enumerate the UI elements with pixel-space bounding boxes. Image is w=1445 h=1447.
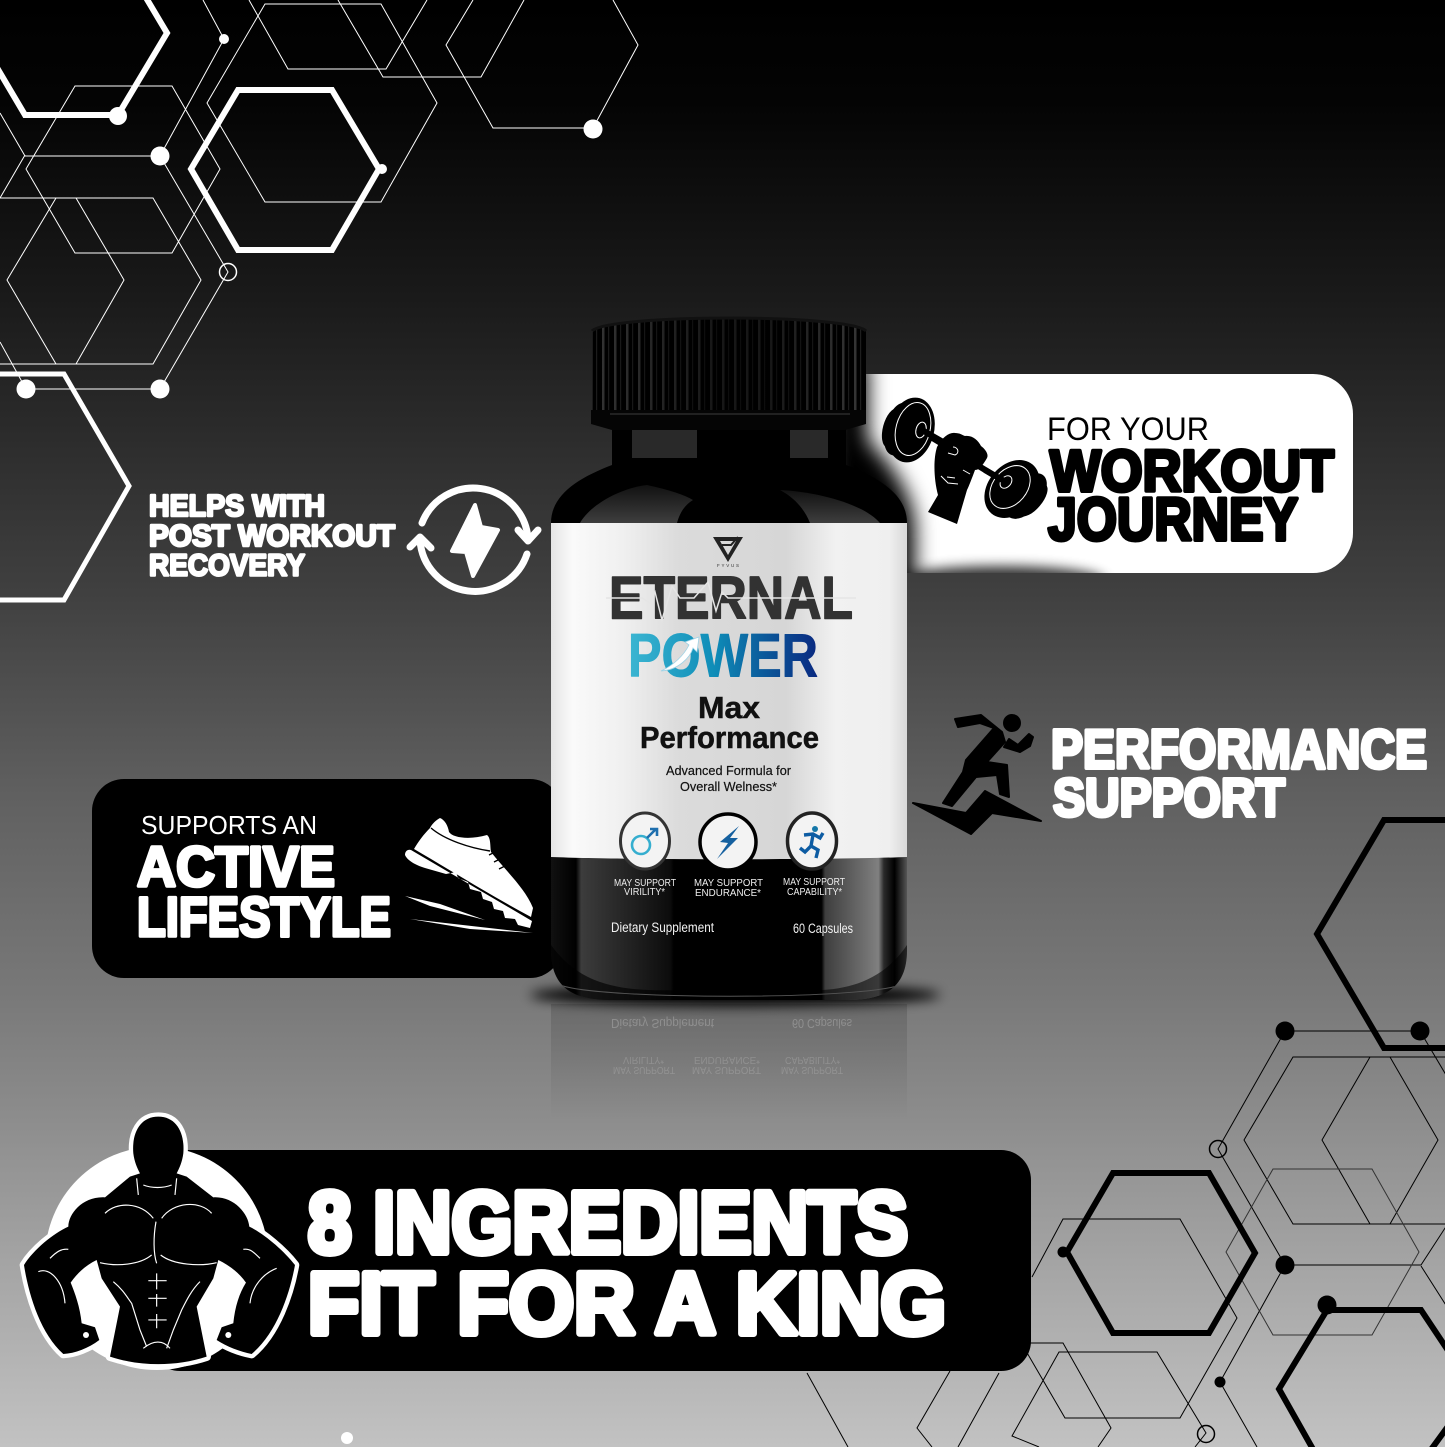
text: helps with post workout recovery: HELPS WITH xyxy=(149,488,325,523)
product bottle reflection: 60 Capsules xyxy=(792,1016,852,1031)
hexagon network bottom right xyxy=(807,820,1445,1447)
badge: endurance xyxy=(700,814,756,870)
product name: Performance xyxy=(640,720,819,755)
panel: supports an active lifestyle xyxy=(92,779,562,978)
badge captions: CAPABILITY* xyxy=(787,887,842,898)
tagline xyxy=(666,763,792,794)
product bottle shadow xyxy=(530,984,940,1006)
product bottle reflection xyxy=(551,1004,907,1122)
bottle lower body xyxy=(551,855,907,1005)
bottle neck and shoulders xyxy=(551,423,907,560)
icon: muscle man xyxy=(24,1117,295,1370)
badge captions: MAY SUPPORT xyxy=(694,878,763,889)
dot bottom xyxy=(341,1432,353,1444)
icon: dumbbell and fist xyxy=(878,392,1055,529)
icon: sprinting runner xyxy=(913,715,1041,834)
text: workout: WORKOUT xyxy=(1050,439,1334,504)
text: fit for a king: FIT FOR A KING xyxy=(308,1256,946,1352)
badge: capability xyxy=(788,813,836,869)
bottle cap xyxy=(591,317,866,430)
tagline: Advanced Formula for xyxy=(666,763,792,778)
capsule count: 60 Capsules xyxy=(793,921,853,936)
panel: for your workout journey xyxy=(846,374,1353,573)
bottle white label xyxy=(551,523,907,859)
badge: virility xyxy=(620,813,670,869)
text: active: ACTIVE xyxy=(137,835,335,899)
brand logo: FYVUS xyxy=(717,563,739,568)
badge captions: MAY SUPPORT xyxy=(783,877,845,888)
tagline: Overall Welness* xyxy=(680,779,777,794)
text: for your: FOR YOUR xyxy=(1047,411,1209,447)
brand name power: POWER xyxy=(628,622,818,690)
panel: 8 ingredients fit for a king xyxy=(150,1150,1031,1371)
badge captions: ENDURANCE* xyxy=(695,888,761,899)
badge captions xyxy=(614,877,845,899)
brand name eternal: ETERNAL xyxy=(609,564,853,632)
brand logo xyxy=(713,537,743,568)
hexagon network top left xyxy=(0,0,638,600)
product bottle reflection: Dietary Supplement xyxy=(611,1016,714,1031)
product bottle reflection: MAY SUPPORT xyxy=(781,1064,843,1075)
text: performance support xyxy=(1051,718,1427,828)
product bottle reflection: VIRILITY* xyxy=(623,1054,664,1065)
text: helps with post workout recovery xyxy=(149,488,395,582)
text: supports an: SUPPORTS AN xyxy=(141,812,317,840)
badge captions: VIRILITY* xyxy=(624,887,665,898)
product name xyxy=(640,690,819,755)
text: lifestyle: LIFESTYLE xyxy=(137,885,391,948)
text: journey: JOURNEY xyxy=(1048,486,1298,553)
bottle gloss highlights xyxy=(580,428,880,523)
text: helps with post workout recovery: POST WORKOUT xyxy=(149,518,395,553)
text: performance support: SUPPORT xyxy=(1053,768,1285,828)
badge captions: MAY SUPPORT xyxy=(614,878,676,889)
product bottle reflection: MAY SUPPORT xyxy=(692,1064,761,1075)
product bottle reflection: MAY SUPPORT xyxy=(613,1064,675,1075)
text: helps with post workout recovery: RECOVERY xyxy=(149,548,305,582)
product bottle reflection: CAPABILITY* xyxy=(785,1054,840,1065)
dietary supplement: Dietary Supplement xyxy=(611,920,714,935)
product bottle reflection: ENDURANCE* xyxy=(694,1054,760,1065)
icon: running shoe xyxy=(405,818,533,933)
text: 8 ingredients: 8 INGREDIENTS xyxy=(308,1174,908,1272)
icon: recovery cycle bolt xyxy=(410,488,538,591)
product name: Max xyxy=(698,690,761,725)
product bottle xyxy=(551,317,907,1005)
